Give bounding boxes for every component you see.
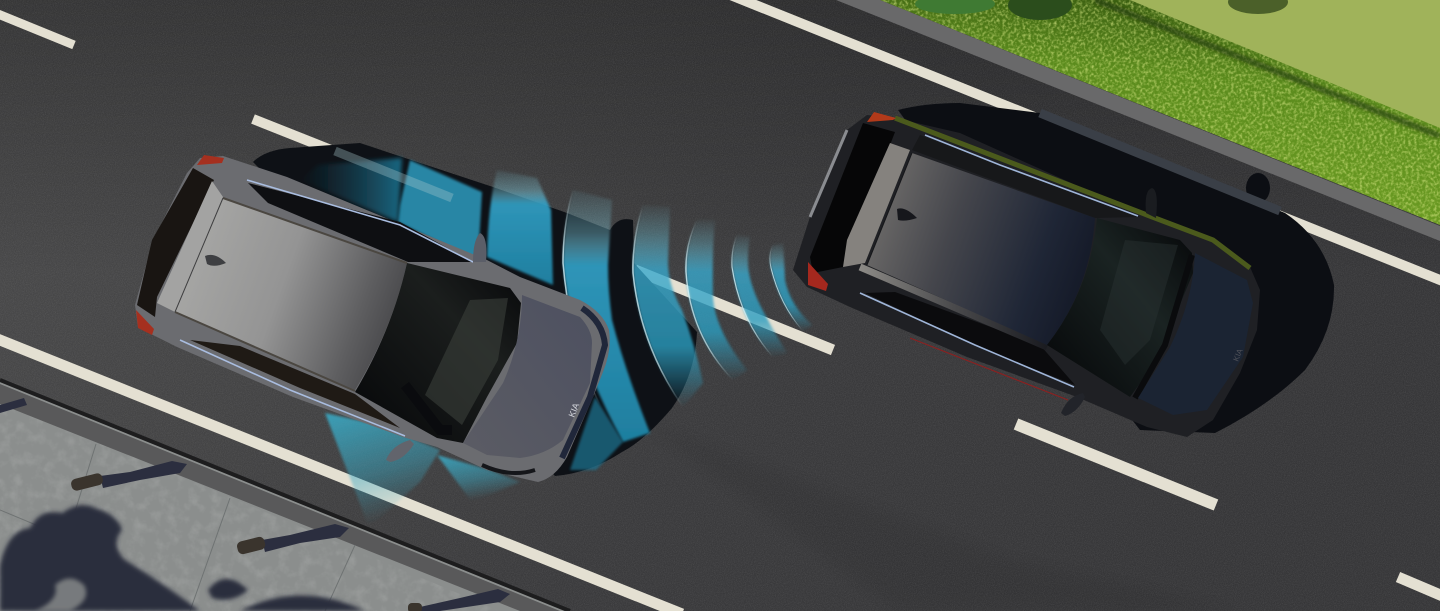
- hood: [1138, 253, 1253, 415]
- car: left, silver, roof view: [135, 155, 610, 482]
- wave 8: [300, 158, 402, 222]
- wing mirrors: [473, 233, 486, 262]
- lower side windows: [190, 340, 400, 428]
- wave 6: [487, 170, 553, 285]
- wiper strip: [1135, 255, 1192, 398]
- car: right, dark, roof view: [793, 112, 1260, 437]
- roof panel: [867, 153, 1095, 345]
- windshield: [355, 263, 521, 443]
- lower side windows: [865, 292, 1075, 385]
- body outline: [135, 156, 610, 482]
- roof rear section: [843, 143, 910, 267]
- shark-fin antenna: [205, 255, 226, 266]
- upper side windows: [248, 183, 473, 262]
- taillights: [197, 155, 224, 165]
- wave 2: [732, 235, 787, 357]
- sidewalk at bottom left: [0, 380, 570, 611]
- rear glass: [137, 168, 214, 317]
- shadow: right car: [898, 103, 1334, 433]
- curb along the hedge: [836, 0, 1440, 241]
- wave below the car, lower-left: [325, 413, 440, 527]
- body outline: [793, 115, 1260, 437]
- roof rear section: [157, 181, 223, 312]
- front trim: [562, 308, 605, 458]
- Kia badge: KIA: [567, 402, 581, 419]
- upper side windows: [912, 135, 1140, 218]
- shark-fin antenna: [897, 208, 917, 221]
- wave 5: [563, 190, 650, 442]
- wave 1: [770, 243, 812, 331]
- taillight: [867, 112, 896, 122]
- Kia badge: KIA: [1232, 347, 1245, 363]
- wing mirrors: [1146, 188, 1157, 218]
- roof lower trim: [860, 267, 1047, 347]
- wave below the car, lower-right: [437, 455, 520, 502]
- windshield: [1047, 218, 1193, 397]
- tree shadows on sidewalk: [0, 505, 365, 611]
- bollards with shadows: [0, 398, 510, 611]
- wave 7: [398, 160, 482, 262]
- roof panel: [175, 198, 407, 390]
- shadow: left car: [253, 143, 697, 476]
- front wave under the bumper: [570, 397, 623, 470]
- dash seen through the waves: [335, 151, 452, 198]
- sensor waves between the cars: [300, 151, 812, 527]
- wave 4: [633, 205, 703, 407]
- rear glass: [810, 123, 895, 273]
- lawn and hedge at top right: [880, 0, 1440, 225]
- hood: [463, 295, 592, 458]
- wave 3: [686, 220, 747, 380]
